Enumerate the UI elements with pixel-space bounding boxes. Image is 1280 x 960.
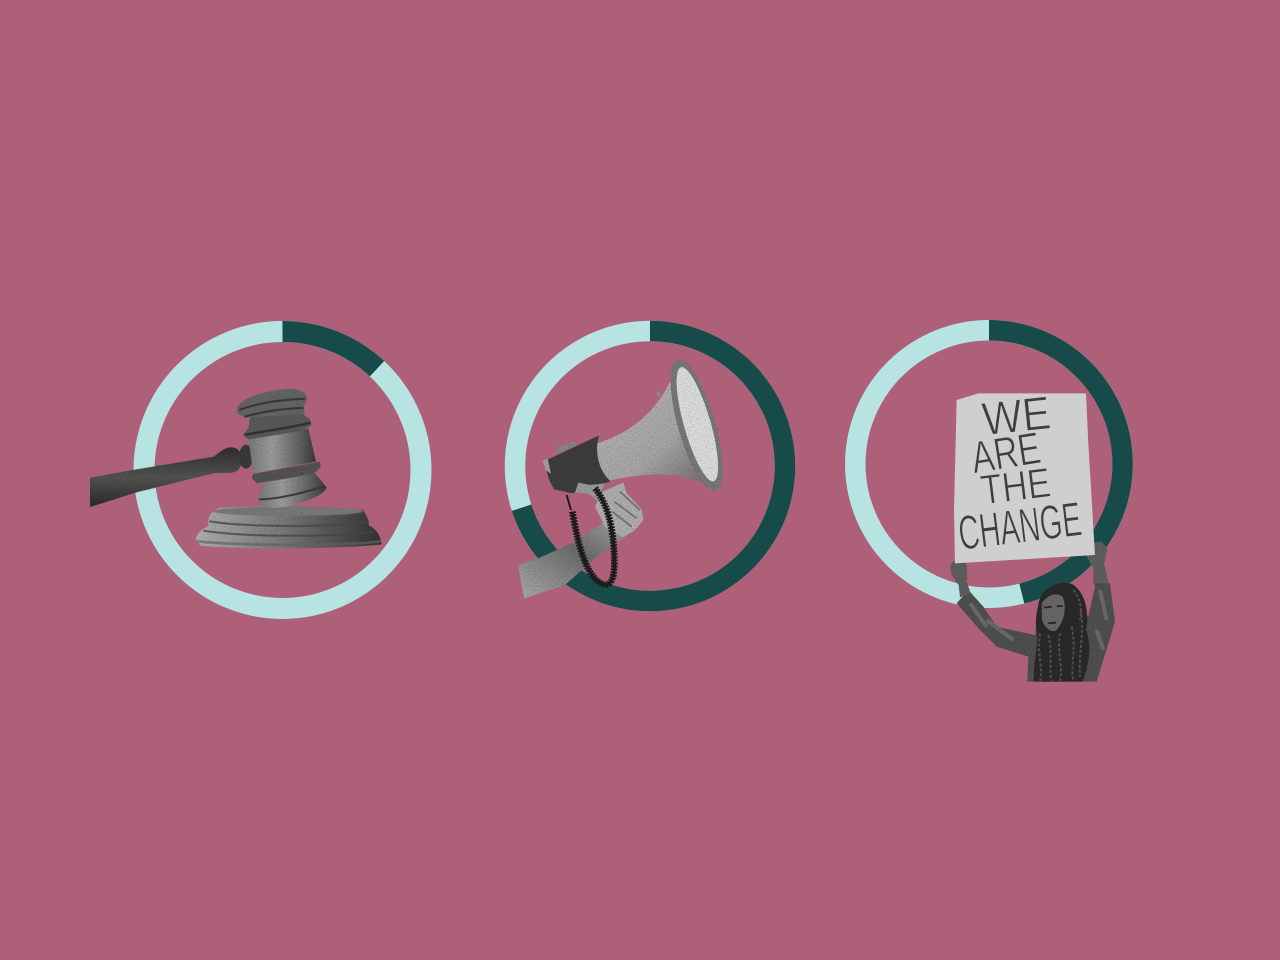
- protester face: [1042, 594, 1065, 631]
- ring track: megaphone: [515, 331, 785, 601]
- protester figure: [950, 542, 1115, 682]
- megaphone body band: [546, 435, 611, 493]
- megaphone switch and bracket: [543, 442, 605, 501]
- ring segment: gavel 12 percent: [282, 332, 377, 369]
- sign text: WE: [980, 386, 1053, 445]
- ring segment: megaphone 70 percent: [522, 331, 785, 601]
- arm and fist: [518, 483, 643, 598]
- protester hair: [1034, 583, 1089, 682]
- protester body and sleeves: [957, 582, 1115, 682]
- icon: hand holding megaphone: [518, 354, 733, 598]
- ring track: protest: [855, 330, 1123, 598]
- sign text: CHANGE: [955, 492, 1084, 561]
- megaphone horn: [596, 382, 709, 488]
- icon: gavel and sound block: [90, 389, 382, 548]
- facial features: [1044, 606, 1063, 623]
- ring segment: protest 46 percent: [989, 330, 1123, 594]
- sign text: [955, 386, 1084, 561]
- sign text: THE: [978, 458, 1053, 514]
- protester forearms and fists: [950, 542, 1109, 597]
- gavel handle: [90, 445, 253, 507]
- sign text: ARE: [968, 422, 1044, 483]
- megaphone bell opening: [668, 364, 727, 485]
- gavel head: [237, 389, 327, 508]
- panel: megaphone progress ring: [515, 331, 785, 601]
- panel: protest sign progress ring: [855, 330, 1123, 682]
- coiled cable: [567, 488, 614, 585]
- ring track: gavel: [144, 332, 421, 608]
- photo: protester holding sign: [950, 386, 1115, 682]
- megaphone bell rim: [660, 354, 733, 496]
- gavel sound block: [196, 506, 382, 548]
- megaphone knob: [656, 390, 662, 397]
- panel: gavel progress ring: [90, 332, 421, 608]
- protest sign board: [954, 386, 1095, 563]
